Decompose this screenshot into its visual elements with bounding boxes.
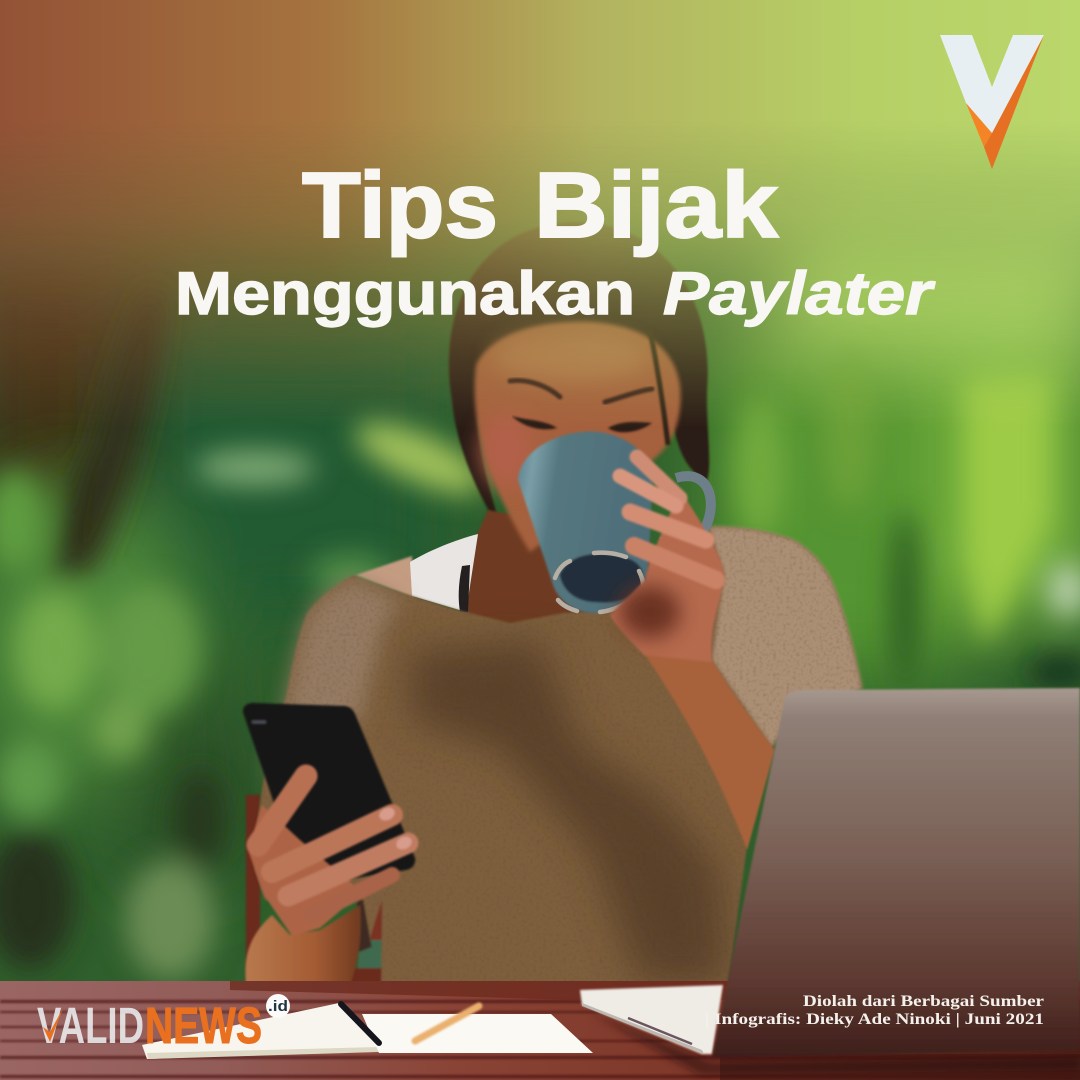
source credits: [705, 993, 1044, 1028]
woman: [243, 222, 862, 985]
source credits: | Infografis: Dieky Ade Ninoki | Juni 2021: [705, 1011, 1044, 1028]
sweater: [255, 527, 862, 984]
left sleeve highlight: [266, 578, 400, 785]
face: [475, 322, 681, 552]
left hand and forearm: [245, 776, 414, 985]
laptop shadow: [590, 1012, 1080, 1075]
brand logo: VALIDNEWS.id: VALID: [37, 997, 144, 1054]
table with wooden slats: [0, 981, 1080, 1080]
sweater diagonal shadow: [410, 640, 728, 984]
chair behind the woman: [246, 795, 388, 986]
notebook with pen and pencil: [142, 1003, 593, 1059]
title: [175, 153, 936, 327]
hand holding the mug: [610, 457, 724, 662]
laptop base: [580, 985, 723, 1054]
brand logo: VALIDNEWS.id: NEWS: [145, 997, 262, 1054]
title: Bijak: [534, 153, 778, 257]
right arm: [644, 653, 775, 850]
brand logo: VALIDNEWS.id: .id: [268, 998, 288, 1015]
top colour gradient overlay: [0, 0, 1080, 430]
bare shoulder skin: [356, 556, 414, 598]
white tank top and strap: [410, 534, 478, 612]
laptop: [580, 688, 1080, 1075]
brand logo: V mark: [940, 35, 1044, 169]
sweater texture: [255, 527, 862, 984]
hair: [449, 222, 709, 528]
phone: [243, 703, 415, 882]
brand logo: VALIDNEWS.id: [37, 994, 290, 1054]
coffee mug: [518, 432, 711, 613]
neck and chest: [466, 510, 650, 640]
pencil: [415, 1006, 479, 1041]
pen: [341, 1004, 379, 1043]
title: Paylater: [663, 260, 936, 327]
title: Tips: [302, 153, 498, 257]
right sleeve highlight: [709, 527, 862, 747]
title: Menggunakan: [175, 260, 635, 327]
source credits: Diolah dari Berbagai Sumber: [803, 993, 1044, 1010]
laptop lid: [712, 688, 1080, 1058]
